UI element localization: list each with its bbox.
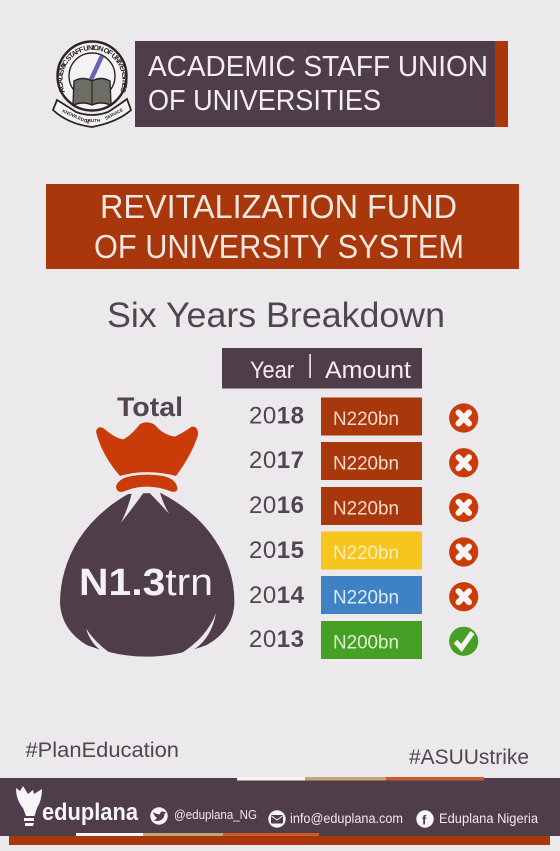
icon: facebook: f: [422, 812, 427, 828]
table header: Amount: [325, 357, 411, 384]
footer bar: [0, 777, 560, 845]
row: 2015: N220bn: [333, 543, 399, 564]
hashtag: PlanEducation: #PlanEducation: [26, 739, 179, 762]
row: 2016: [249, 487, 478, 525]
row: 2013: 2013: [249, 626, 304, 653]
icon: ASUU logo seal: TRUTH: [85, 118, 100, 123]
row: 2014: N220bn: [333, 588, 399, 608]
icon: facebook: [416, 810, 434, 828]
row: 2013: [249, 621, 478, 659]
title banner: OF UNIVERSITY SYSTEM: [94, 228, 464, 265]
bag total amount: N1.3trn: [79, 562, 213, 604]
row: 2018: [249, 398, 478, 436]
row: 2017: N220bn: [333, 454, 399, 474]
row: 2015: [249, 532, 478, 570]
row: 2014: 2014: [249, 582, 305, 609]
brand name: eduplana: [42, 799, 139, 826]
header: union name panel: [135, 41, 508, 127]
icon: eduplana bulb: [16, 786, 42, 826]
header: union name panel: ACADEMIC STAFF UNION: [148, 51, 488, 83]
icon: ASUU logo seal: [52, 40, 132, 128]
icon: ASUU logo seal: ACADEMIC STAFF UNION OF UNIVERSITIES: [58, 45, 128, 92]
icon: twitter: [150, 807, 168, 825]
table header: Year: [250, 357, 294, 384]
row: 2017: [249, 442, 478, 480]
icon: ASUU logo seal: SERVICE: [104, 107, 124, 121]
title banner: [46, 184, 519, 269]
row: 2016: 2016: [249, 492, 304, 519]
total label: Total: [117, 392, 183, 422]
hashtag: ASUUstrike: #ASUUstrike: [409, 746, 529, 769]
email address: info@eduplana.com: [290, 811, 403, 826]
twitter handle: @eduplana_NG: [174, 808, 257, 822]
title banner: REVITALIZATION FUND: [100, 188, 457, 225]
icon: email: [268, 810, 286, 828]
row: 2013: N200bn: [333, 632, 399, 654]
icon: ASUU logo seal: KNOWLEDGE: [62, 108, 91, 125]
row: 2015: 2015: [249, 537, 304, 564]
row: 2018: 2018: [249, 402, 304, 430]
facebook name: Eduplana Nigeria: [439, 811, 538, 826]
icon: money bag: [60, 422, 234, 659]
table header: [222, 348, 422, 388]
row: 2017: 2017: [249, 447, 304, 474]
row: 2016: N220bn: [333, 498, 399, 520]
row: 2014: [249, 576, 478, 614]
header: union name panel: OF UNIVERSITIES: [148, 85, 381, 117]
row: 2018: N220bn: [333, 409, 399, 430]
subtitle: Six Years Breakdown: [107, 296, 445, 335]
